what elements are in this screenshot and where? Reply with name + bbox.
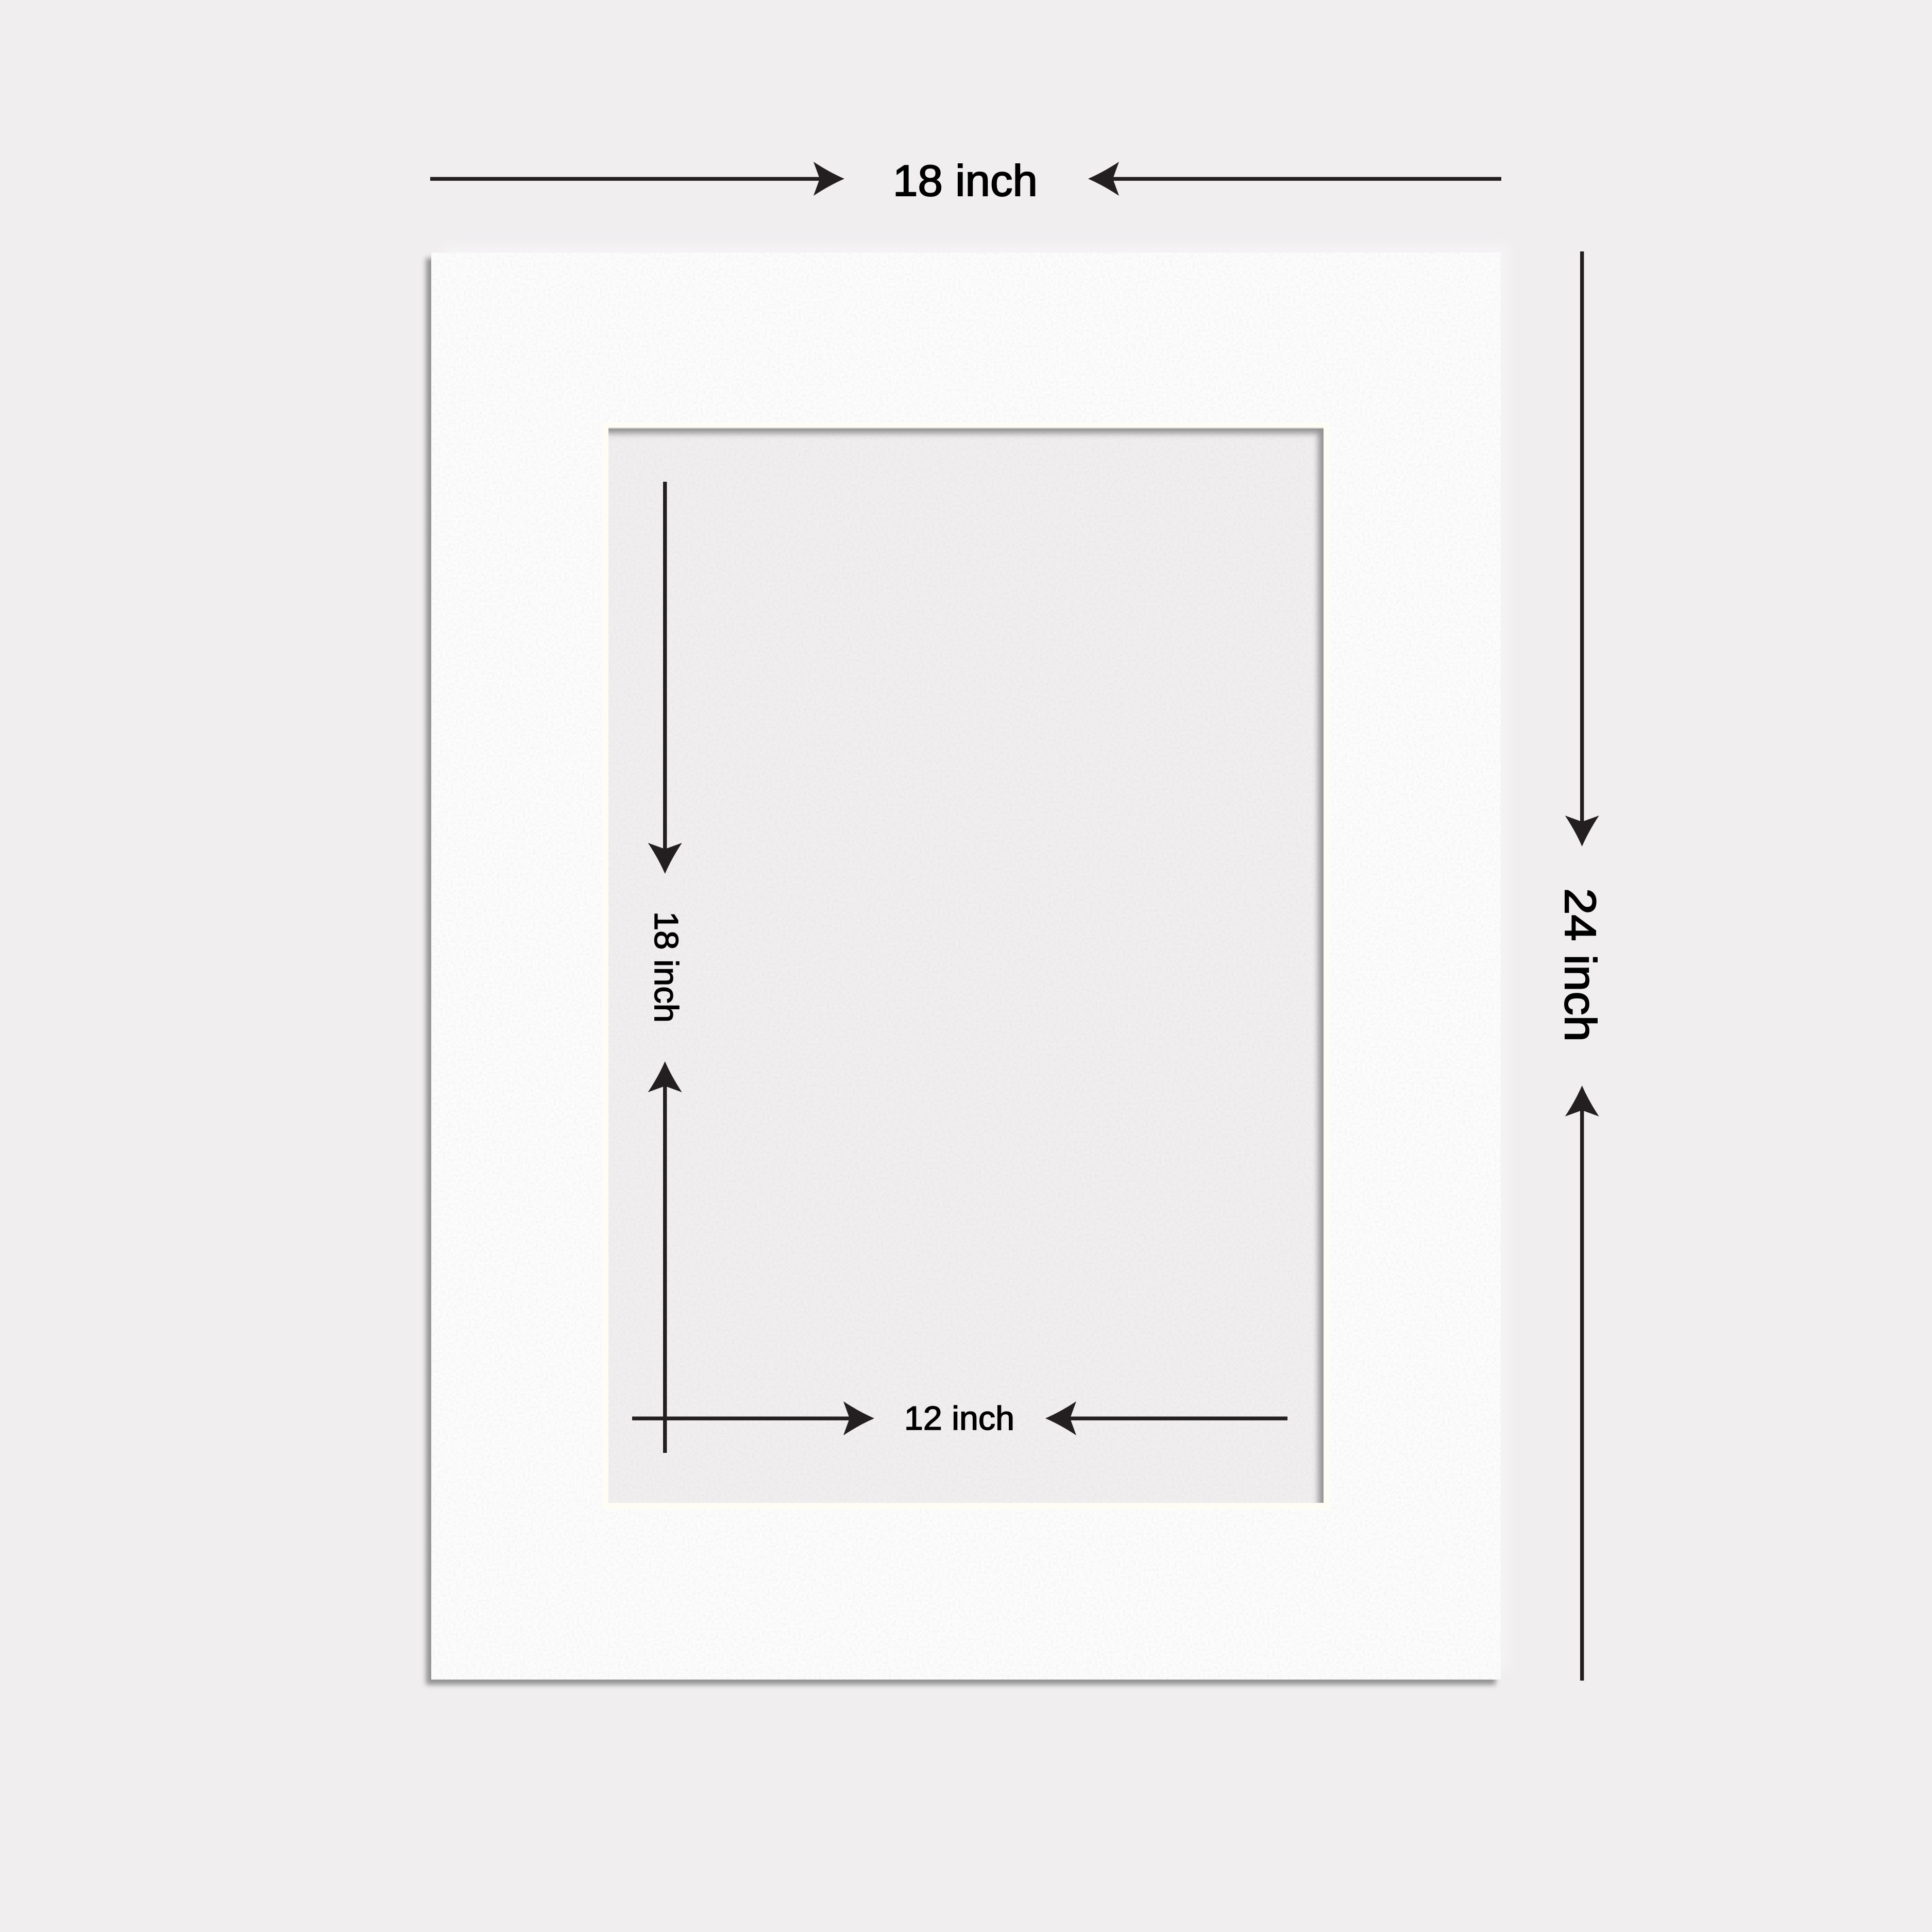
window bevel — [602, 422, 1330, 1510]
arrow: window width, left — [632, 1401, 874, 1435]
arrow: window height, top — [648, 482, 682, 874]
text: window width label: 12 inch — [904, 1399, 1014, 1437]
arrow: outer height, top — [1565, 251, 1599, 846]
mat paper texture — [431, 252, 1501, 1680]
arrow: window height, bottom — [648, 1061, 682, 1453]
arrow: outer width, right — [1088, 162, 1501, 196]
mat outer drop shadow — [426, 258, 1496, 1685]
window inner shadows — [608, 428, 1324, 1503]
heading: outer height label: 24 inch — [1555, 888, 1604, 1042]
mat board surface with window cut-out — [431, 252, 1501, 1680]
arrow: outer width, left — [430, 162, 844, 196]
panel: mat board — [426, 243, 1510, 1685]
arrow: outer height, bottom — [1565, 1086, 1599, 1681]
arrow: window width, right — [1045, 1401, 1287, 1435]
heading: outer width label: 18 inch — [893, 157, 1038, 206]
window opening showing the backdrop — [608, 428, 1324, 1503]
faint halo around mat — [443, 243, 1510, 1670]
text: window height label: 18 inch — [648, 911, 685, 1023]
